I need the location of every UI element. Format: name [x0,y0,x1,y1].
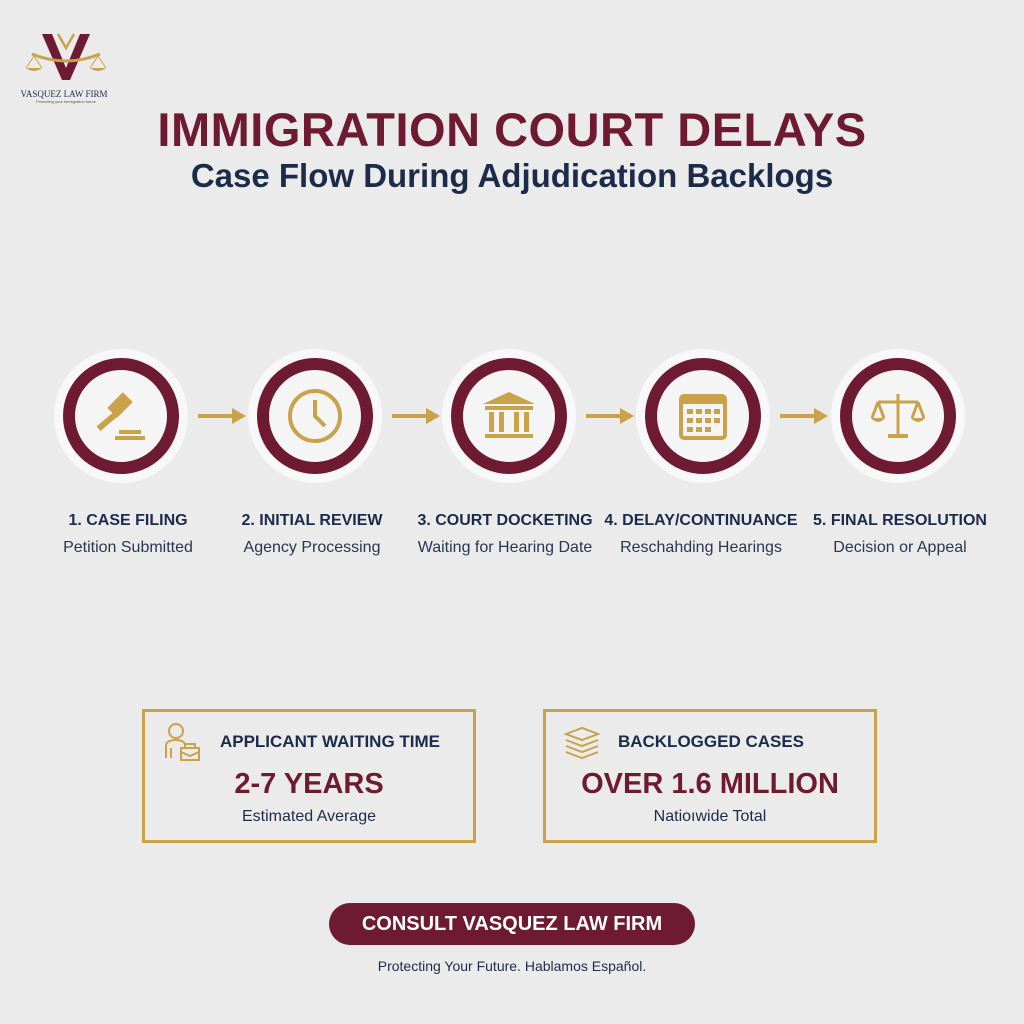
arrow 4 [780,408,828,424]
step 2 circle [248,349,382,483]
label 5: Decision or Appeal [833,539,967,556]
label 2: 2. INITIAL REVIEW [241,512,383,529]
text: Protecting your immigration future [36,99,96,104]
tagline: Protecting Your Future. Hablamos Español. [378,958,646,974]
label 3: 3. COURT DOCKETING [417,512,593,529]
panel: waiting time [142,709,476,843]
step 4 circle [636,349,770,483]
label 3: Waiting for Hearing Date [418,539,592,556]
label 2: Agency Processing [244,539,380,556]
panel: backlogged cases [543,709,877,843]
icon: applicant [165,723,200,761]
subtitle: Case Flow During Adjudication Backlogs [191,157,833,194]
label 1 [63,512,193,556]
panel: backlogged cases: OVER 1.6 MILLION [581,768,839,800]
label 2 [241,512,383,556]
label 4 [604,512,798,556]
label 4: Reschahding Hearings [620,539,782,556]
label 5: 5. FINAL RESOLUTION [813,512,987,529]
arrow 1 [198,408,246,424]
panel: waiting time: APPLICANT WAITING TIME [220,732,440,751]
label 4: 4. DELAY/CONTINUANCE [604,512,798,529]
CTA button: CONSULT VASQUEZ LAW FIRM [362,913,662,935]
icon: stack [564,726,600,760]
panel: waiting time: 2-7 YEARS [234,768,384,800]
panel: waiting time: Estimated Average [242,808,376,825]
logo [20,33,108,104]
label 3 [417,512,593,556]
logo: VASQUEZ LAW FIRM [21,89,107,99]
step 1 circle [54,349,188,483]
label 5 [813,512,987,556]
step 3 circle [442,349,576,483]
step 5 circle [831,349,965,483]
panel: backlogged cases: Natioıwide Total [654,808,766,825]
arrow 2 [392,408,440,424]
CTA button [329,903,695,945]
label 1: Petition Submitted [63,539,193,556]
label 1: 1. CASE FILING [68,512,188,529]
title: IMMIGRATION COURT DELAYS [157,103,867,156]
panel: backlogged cases: BACKLOGGED CASES [618,732,804,751]
arrow 3 [586,408,634,424]
